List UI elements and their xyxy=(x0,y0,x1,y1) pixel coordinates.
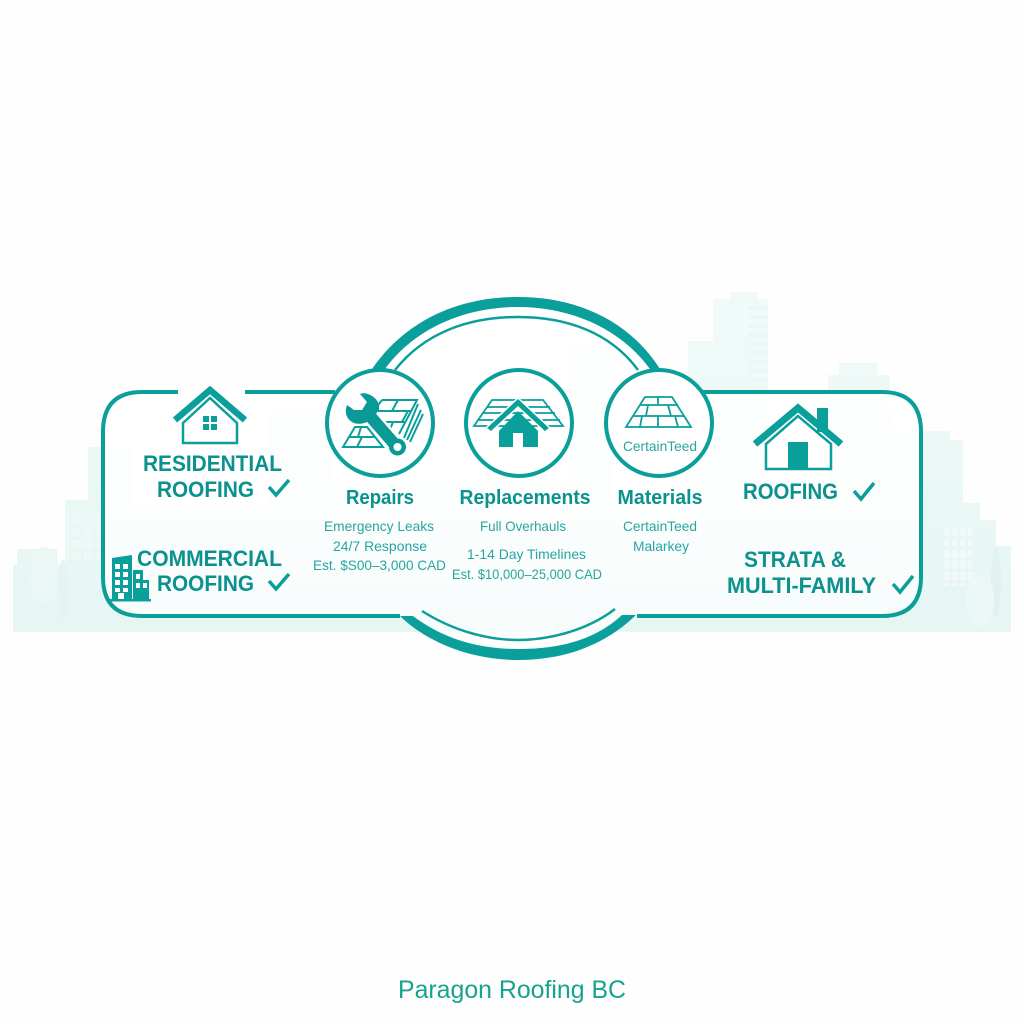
circle: repairs xyxy=(327,370,433,476)
top arc xyxy=(372,297,660,370)
heading: strata and multi-family: STRATA & xyxy=(744,547,846,572)
panel backdrop xyxy=(102,300,922,657)
column: repairs xyxy=(313,487,446,573)
icon: shingles and wrench xyxy=(343,393,423,456)
circle: replacements xyxy=(466,370,572,476)
column: replacements xyxy=(452,487,602,582)
check: roofing xyxy=(854,483,874,499)
column: repairs: Est. $S00–3,000 CAD xyxy=(313,557,446,573)
icon: shingle tile grid xyxy=(626,397,691,427)
heading: commercial roofing xyxy=(137,546,282,596)
column: materials: Malarkey xyxy=(633,538,689,554)
icon: roofing house with chimney xyxy=(755,408,841,469)
icon label: CertainTeed: CertainTeed xyxy=(623,438,697,454)
check: residential xyxy=(269,480,289,495)
heading: roofing: ROOFING xyxy=(743,479,838,504)
column: repairs: Repairs xyxy=(346,487,414,509)
column: replacements: Full Overhauls xyxy=(480,518,566,534)
footer brand name: Paragon Roofing BC xyxy=(398,976,626,1004)
heading: residential roofing: ROOFING xyxy=(157,477,254,502)
column: materials xyxy=(618,487,702,554)
heading: strata and multi-family xyxy=(727,547,876,598)
heading: residential roofing xyxy=(143,451,282,502)
icon: commercial buildings xyxy=(110,555,151,602)
heading: commercial roofing: COMMERCIAL xyxy=(137,546,282,571)
column: repairs: Emergency Leaks xyxy=(324,518,434,534)
icon: residential house xyxy=(175,390,245,443)
heading: commercial roofing: ROOFING xyxy=(157,571,254,596)
check: commercial xyxy=(269,574,289,589)
panel outline xyxy=(103,392,921,616)
circle: materials xyxy=(606,370,712,476)
icon: roof with house xyxy=(474,398,563,447)
bottom arc xyxy=(400,609,636,660)
column: materials: Materials xyxy=(618,487,702,509)
skyline background xyxy=(13,292,1011,632)
column: repairs: 24/7 Response xyxy=(333,538,427,554)
column: replacements: 1-14 Day Timelines xyxy=(467,546,586,562)
column: replacements: Replacements xyxy=(460,487,590,509)
heading: strata and multi-family: MULTI-FAMILY xyxy=(727,573,876,598)
check: strata xyxy=(893,576,913,592)
column: materials: CertainTeed xyxy=(623,518,697,534)
column: replacements: Est. $10,000–25,000 CAD xyxy=(452,566,602,582)
heading: residential roofing: RESIDENTIAL xyxy=(143,451,282,476)
